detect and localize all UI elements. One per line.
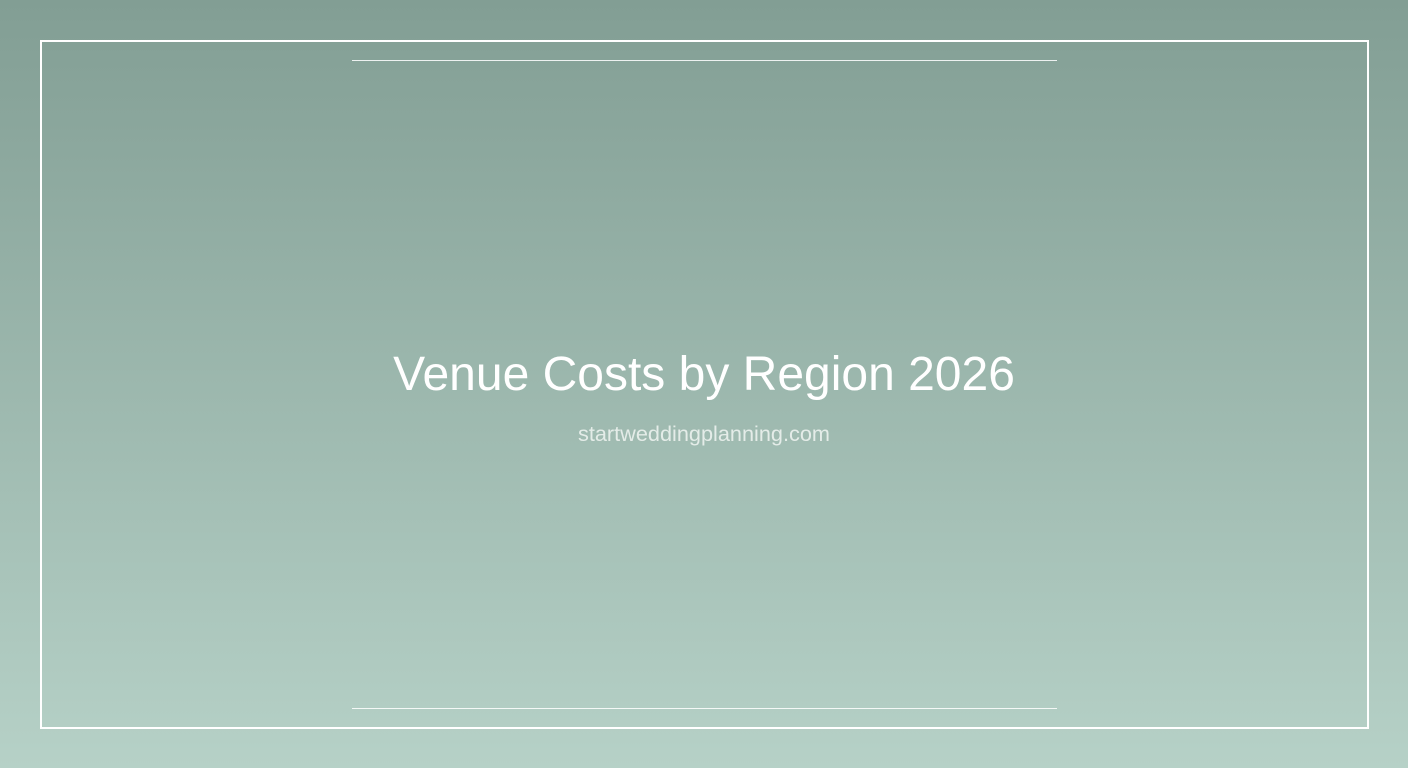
title: Venue Costs by Region 2026 xyxy=(393,348,1015,401)
subtitle: website: startweddingplanning.com xyxy=(578,421,830,446)
